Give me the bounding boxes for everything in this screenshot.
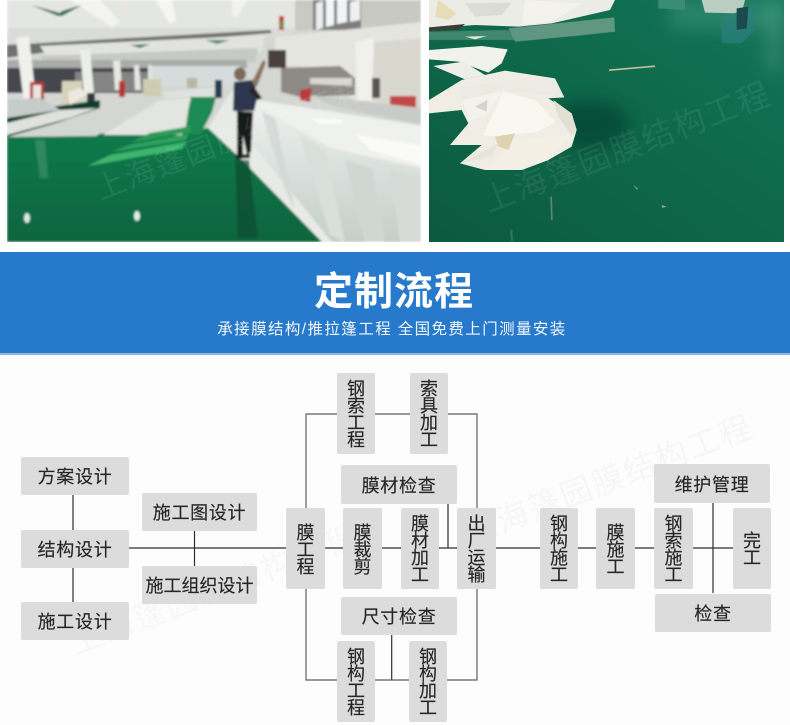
- green floor: [7, 128, 330, 242]
- step: 出厂运输: 运: [468, 548, 486, 568]
- step: 膜工程: 膜: [296, 522, 314, 542]
- step: 钢索工程: 钢: [347, 379, 365, 399]
- step: 钢构工程: 构: [347, 664, 365, 684]
- step: 完工: 工: [743, 548, 761, 568]
- banner: blue title band: [0, 252, 790, 355]
- step: 钢构加工: 构: [419, 664, 437, 684]
- long white table with membrane: [253, 100, 421, 242]
- flowchart: custom process: [0, 355, 790, 725]
- step: 膜裁剪: 裁: [354, 540, 372, 560]
- step: 膜裁剪: 剪: [354, 556, 372, 576]
- step: 膜材加工: [401, 508, 439, 589]
- step: 钢构施工: 构: [550, 531, 568, 551]
- step: 出厂运输: [457, 508, 496, 589]
- step: 施工组织设计: [142, 566, 257, 604]
- subtitle: 承接膜结构/推拉篷工程 全国免费上门测量安装: [217, 321, 567, 338]
- step: 钢索施工: 钢: [664, 514, 682, 534]
- specks and scratches: [550, 197, 553, 220]
- watermark: photo two: 上海篷园膜结构工程: [478, 75, 776, 219]
- step: 膜施工: 工: [606, 556, 624, 576]
- photo: factory workshop with membrane welding machine: [7, 0, 421, 242]
- step: 索具加工: 索: [420, 379, 438, 399]
- step: 膜工程: 程: [296, 556, 314, 576]
- step: 膜材检查: [341, 465, 457, 504]
- step: 膜材加工: 加: [411, 548, 429, 568]
- step: 钢构施工: [540, 508, 578, 589]
- step: 钢构加工: 加: [419, 681, 437, 701]
- step: 膜工程: [286, 508, 325, 589]
- step: 方案设计: [21, 457, 129, 495]
- main crumpled pile: [429, 71, 577, 170]
- step: 钢构工程: 工: [347, 681, 365, 701]
- step: 钢索工程: 索: [347, 396, 365, 416]
- step: 维护管理: 维护管理: [675, 474, 749, 494]
- welding machine: [275, 22, 421, 102]
- step: 施工图设计: [142, 493, 257, 531]
- fire cabinets: [30, 82, 44, 109]
- floor light reflection: [88, 142, 186, 166]
- machines at the back: [62, 81, 82, 105]
- watermark: photo one: 上海篷园膜结构工程: [91, 73, 371, 207]
- ceiling and walls: [7, 29, 414, 139]
- step: 尺寸检查: 尺寸检查: [362, 607, 436, 627]
- step: 钢构加工: 工: [419, 698, 437, 718]
- connector lines and watermark: [65, 408, 758, 681]
- step: 膜施工: [596, 508, 635, 589]
- step: 完工: 完: [743, 531, 761, 551]
- step: 膜施工: 施: [606, 540, 624, 560]
- step: 索具加工: [410, 373, 448, 454]
- step: 钢构工程: 钢: [347, 647, 365, 667]
- photo: cut membrane pieces on green floor: [429, 0, 784, 242]
- step: 钢索施工: 索: [664, 531, 682, 551]
- step: 结构设计: 结构设计: [38, 540, 112, 560]
- second piece: [429, 46, 508, 73]
- step: 维护管理: [654, 464, 770, 503]
- step: 钢构加工: 钢: [419, 647, 437, 667]
- step: 施工组织设计: 施工组织设计: [146, 576, 254, 596]
- step: 出厂运输: 厂: [468, 531, 486, 551]
- connector lines and watermark: 上海篷园膜结构工程: [460, 408, 758, 552]
- worker: [234, 68, 246, 80]
- step: 膜裁剪: 膜: [354, 522, 372, 542]
- step: 膜工程: 工: [296, 540, 314, 560]
- step: 膜施工: 膜: [606, 522, 624, 542]
- step: 方案设计: 方案设计: [38, 467, 112, 487]
- top pile: [429, 0, 615, 28]
- step: 膜材检查: 膜材检查: [362, 476, 436, 496]
- step: 钢构施工: 钢: [550, 514, 568, 534]
- step: 索具加工: 工: [420, 430, 438, 450]
- step: 检查: 检查: [694, 604, 732, 624]
- step: 钢构施工: 施: [550, 548, 568, 568]
- step: 钢索工程: 工: [347, 413, 365, 433]
- connector lines and watermark: 上海篷园膜结构工程: [65, 518, 363, 662]
- step: 钢索施工: 施: [664, 548, 682, 568]
- step: 施工设计: 施工设计: [38, 612, 112, 632]
- step: 膜材加工: 材: [411, 531, 429, 551]
- step: 索具加工: 具: [420, 396, 438, 416]
- step: 钢构加工: [409, 641, 447, 722]
- step: 出厂运输: 输: [468, 565, 486, 585]
- step: 钢索工程: [337, 373, 375, 454]
- pillars: [16, 36, 36, 103]
- step: 钢构工程: [337, 641, 375, 722]
- right wall and windows: [295, 0, 421, 30]
- step: 膜材加工: 工: [411, 565, 429, 585]
- heading: 定制流程: [314, 271, 474, 314]
- step: 出厂运输: 出: [468, 514, 486, 534]
- worker reflection: [235, 160, 258, 238]
- step: 施工图设计: 施工图设计: [153, 503, 246, 523]
- ceiling fans: [31, 5, 82, 16]
- step: 尺寸检查: [341, 597, 457, 635]
- step: 完工: [733, 508, 771, 589]
- step: 钢索施工: [654, 508, 693, 589]
- step: 钢构施工: 工: [550, 565, 568, 585]
- white membrane strips on the floor: [12, 132, 101, 140]
- floor reflections: [508, 17, 615, 42]
- step: 索具加工: 加: [420, 413, 438, 433]
- step: 膜裁剪: [343, 508, 382, 589]
- step: 钢索工程: 程: [347, 430, 365, 450]
- step: 施工设计: [21, 602, 129, 640]
- step: 结构设计: [21, 530, 129, 568]
- step: 钢构工程: 程: [347, 698, 365, 718]
- step: 膜材加工: 膜: [411, 514, 429, 534]
- step: 钢索施工: 工: [664, 565, 682, 585]
- step: 检查: [655, 594, 771, 632]
- white membrane on floor beside the table: [208, 90, 330, 242]
